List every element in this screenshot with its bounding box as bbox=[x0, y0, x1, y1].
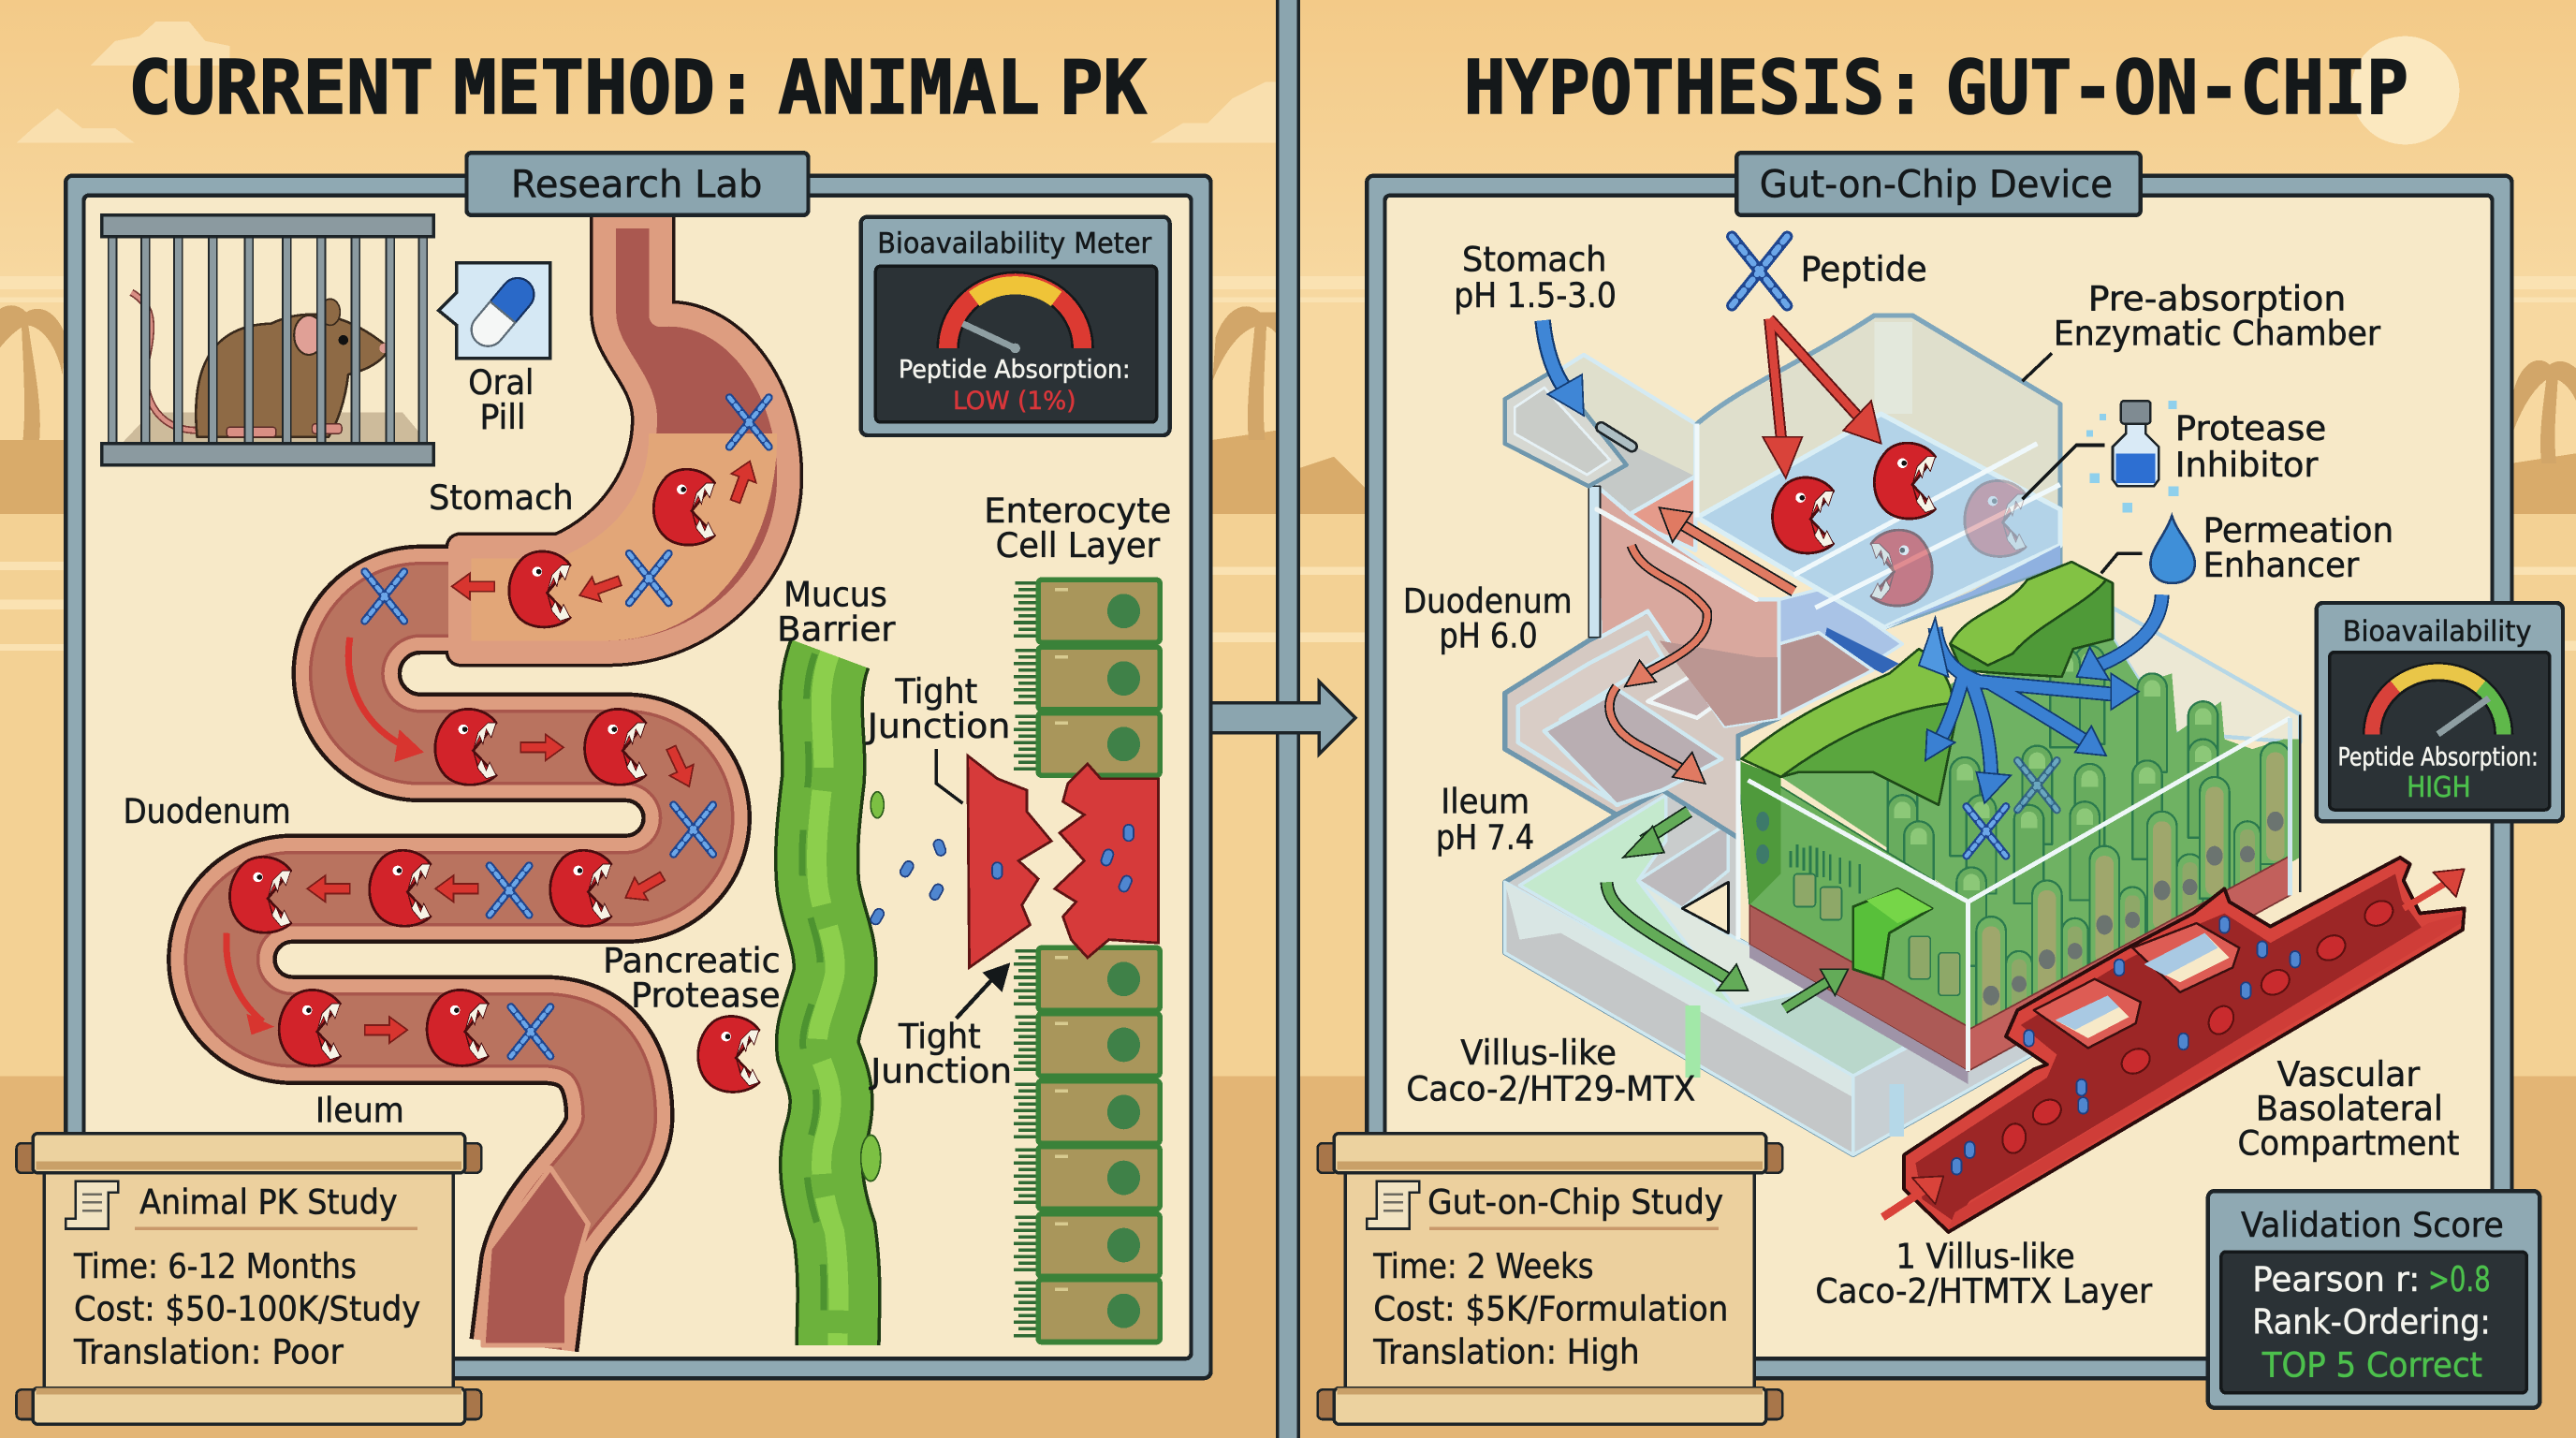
bioavailability meter bbox=[861, 217, 1170, 435]
absorption readout: LOW (1%) bbox=[953, 388, 1076, 416]
validation metrics: >0.8 bbox=[2428, 1259, 2491, 1299]
scroll: animal PK study bbox=[17, 1134, 481, 1424]
interior villi bbox=[1888, 646, 2217, 966]
label: duodenum pH bbox=[1403, 580, 1573, 655]
inlet arrow bbox=[1543, 320, 1584, 416]
gauge title: Bioavailability bbox=[2343, 615, 2532, 648]
window one bbox=[2034, 979, 2141, 1048]
label: protease inhibitor bbox=[2175, 408, 2326, 485]
label: protease inhibitor: Protease bbox=[2175, 408, 2326, 448]
heading: current method: CURRENT METHOD: ANIMAL PK bbox=[128, 45, 1148, 131]
peptides crossing the layer bbox=[1967, 760, 2056, 856]
label: stomach: Stomach bbox=[429, 477, 574, 518]
label: mucus barrier bbox=[777, 574, 896, 649]
center divider bbox=[1278, 0, 1298, 1438]
meter title: Bioavailability Meter bbox=[877, 227, 1152, 260]
label: permeation enhancer bbox=[2203, 510, 2393, 585]
label: permeation enhancer: Permeation bbox=[2203, 510, 2393, 550]
gut-on-chip device body bbox=[1505, 315, 2300, 1155]
gauge bbox=[948, 283, 1083, 353]
label: mucus barrier: Barrier bbox=[777, 609, 896, 649]
icon: permeation enhancer drop bbox=[2101, 516, 2195, 583]
label: villus-like cells: Caco-2/HT29-MTX bbox=[1406, 1069, 1695, 1109]
scroll stats: Cost: $5K/Formulation bbox=[1373, 1289, 1728, 1329]
label: villus-like cells: Villus-like bbox=[1460, 1033, 1617, 1073]
label: enzymatic chamber bbox=[2023, 279, 2381, 381]
rat bbox=[131, 292, 389, 437]
scroll heading: Gut-on-Chip Study bbox=[1427, 1182, 1723, 1223]
label: pancreatic protease: Pancreatic bbox=[603, 941, 781, 981]
label: protease inhibitor: Inhibitor bbox=[2175, 445, 2319, 485]
validation metrics: TOP 5 Correct bbox=[2261, 1344, 2482, 1385]
basal red layer bbox=[1749, 856, 2291, 1084]
label: tight junction lower bbox=[869, 962, 1012, 1091]
label: stomach pH: Stomach bbox=[1462, 240, 1606, 280]
window two bbox=[2132, 923, 2239, 992]
enzymes in chamber bbox=[1773, 443, 2026, 606]
cube left face bbox=[1738, 760, 1969, 1027]
glass cube edges bbox=[1738, 714, 2300, 1071]
gauge dial bbox=[2372, 671, 2504, 734]
label: duodenum pH: pH 6.0 bbox=[1439, 615, 1538, 655]
lab title plate: Research Lab bbox=[511, 163, 762, 207]
salmon channel arrows bbox=[1609, 507, 1794, 784]
absorbed peptide fragments bbox=[1952, 917, 2300, 1175]
label: oral pill: Oral bbox=[468, 362, 534, 403]
label: tight junction upper bbox=[866, 671, 1010, 803]
label: ileum pH: pH 7.4 bbox=[1436, 817, 1534, 858]
flow arrows bbox=[1543, 318, 2162, 1008]
label: stomach pH: pH 1.5-3.0 bbox=[1454, 275, 1617, 315]
validation score panel bbox=[2208, 1191, 2539, 1408]
label: enterocyte cell layer bbox=[984, 491, 1171, 565]
device title plate bbox=[1736, 153, 2141, 215]
label: villus layer: Caco-2/HTMTX Layer bbox=[1815, 1270, 2153, 1311]
gauge readout bbox=[2338, 744, 2539, 804]
label: enterocyte cell layer: Enterocyte bbox=[984, 491, 1171, 531]
enterocyte cell layer bbox=[1014, 580, 1160, 1343]
validation metrics bbox=[2252, 1259, 2491, 1385]
lab title plate bbox=[466, 153, 809, 215]
scroll stats: Translation: High bbox=[1372, 1331, 1640, 1372]
label: vascular basolateral compartment: Vascular bbox=[2277, 1054, 2421, 1094]
label: pancreatic protease bbox=[603, 941, 781, 1016]
scroll: gut-on-chip study bbox=[1318, 1134, 1782, 1424]
icon and label: peptide: Peptide bbox=[1801, 249, 1927, 289]
label: vascular basolateral compartment bbox=[2237, 1054, 2459, 1164]
mucus barrier bbox=[802, 653, 884, 1345]
label: duodenum: Duodenum bbox=[124, 791, 291, 831]
label: tight junction lower: Junction bbox=[869, 1050, 1012, 1091]
icon: oral pill bubble bbox=[439, 263, 550, 359]
icon: pancreatic protease enzyme bbox=[698, 1017, 759, 1092]
vascular flow arrows bbox=[1882, 869, 2465, 1217]
cube back wall and base bbox=[1781, 608, 2300, 1034]
cube right face villi bbox=[1976, 742, 2291, 1038]
peptide input arrows bbox=[1763, 318, 1881, 478]
lower ileum slab bbox=[1505, 790, 2037, 1155]
arrow: current method to hypothesis bbox=[1209, 682, 1355, 754]
label: tight junction upper: Junction bbox=[866, 706, 1010, 746]
label: duodenum pH: Duodenum bbox=[1403, 580, 1573, 621]
scroll heading: Animal PK Study bbox=[139, 1182, 398, 1223]
label: tight junction upper: Tight bbox=[895, 671, 977, 712]
red blood cells bbox=[2000, 896, 2397, 1155]
label: enzymatic chamber: Enzymatic Chamber bbox=[2054, 313, 2381, 353]
label: oral pill: Pill bbox=[479, 397, 526, 437]
label: vascular basolateral compartment: Compartment bbox=[2237, 1123, 2459, 1164]
heading: hypothesis: HYPOTHESIS: GUT-ON-CHIP bbox=[1464, 45, 2408, 131]
label: ileum pH: Ileum bbox=[1441, 782, 1530, 822]
scroll stats bbox=[1372, 1246, 1728, 1372]
stomach inlet and back column bbox=[1505, 355, 1779, 726]
validation metrics: Pearson r: bbox=[2252, 1259, 2420, 1299]
enzymatic chamber bbox=[1697, 315, 2060, 627]
label: vascular basolateral compartment: Basolateral bbox=[2256, 1089, 2443, 1129]
label: enterocyte cell layer: Cell Layer bbox=[996, 525, 1161, 565]
label: enzymatic chamber: Pre-absorption bbox=[2088, 279, 2346, 319]
label: ileum: Ileum bbox=[315, 1090, 404, 1130]
scroll stats: Translation: Poor bbox=[73, 1331, 344, 1372]
label: ileum pH bbox=[1436, 782, 1534, 858]
green channel arrows bbox=[1606, 812, 1848, 1008]
scroll stats: Time: 2 Weeks bbox=[1372, 1246, 1593, 1286]
label: oral pill bbox=[468, 362, 534, 437]
panel: research lab bbox=[66, 153, 1211, 1378]
absorption readout: Peptide Absorption: bbox=[899, 357, 1131, 385]
mucus layer on cube bbox=[1741, 562, 2113, 805]
gauge readout: Peptide Absorption: bbox=[2338, 744, 2539, 772]
enzymes and peptides in the gut bbox=[227, 398, 768, 1065]
scroll stats: Time: 6-12 Months bbox=[73, 1246, 357, 1286]
label: villus layer bbox=[1815, 1237, 2153, 1311]
label: villus layer: 1 Villus-like bbox=[1895, 1237, 2075, 1277]
bioavailability gauge panel bbox=[2317, 603, 2563, 821]
validation title: Validation Score bbox=[2241, 1205, 2504, 1245]
icon: document bbox=[1367, 1181, 1419, 1228]
scroll stats: Cost: $50-100K/Study bbox=[74, 1289, 420, 1329]
label: pancreatic protease: Protease bbox=[631, 976, 781, 1016]
label: tight junction lower: Tight bbox=[898, 1016, 981, 1056]
blue permeation arrows bbox=[1919, 594, 2162, 803]
label: mucus barrier: Mucus bbox=[783, 574, 887, 614]
label: permeation enhancer: Enhancer bbox=[2203, 545, 2360, 585]
label: villus-like cells bbox=[1406, 1033, 1695, 1109]
icon: protease inhibitor vial bbox=[2023, 401, 2178, 512]
absorption readout bbox=[899, 357, 1131, 416]
duodenum to ileum channel bbox=[1505, 611, 1779, 838]
digestive tract: stomach and intestine bbox=[222, 217, 788, 1345]
vascular basolateral channel bbox=[1882, 858, 2465, 1232]
broken tight junction bbox=[869, 756, 1158, 967]
icon: document bbox=[66, 1181, 118, 1228]
gauge readout: HIGH bbox=[2407, 771, 2471, 804]
device title plate: Gut-on-Chip Device bbox=[1760, 163, 2113, 207]
scroll stats bbox=[73, 1246, 420, 1372]
validation metrics: Rank-Ordering: bbox=[2252, 1302, 2491, 1343]
label: stomach pH bbox=[1454, 240, 1617, 315]
mid chamber under the enzymatic chamber bbox=[1779, 588, 1902, 718]
cage bars bbox=[109, 230, 427, 447]
cage with rat bbox=[102, 215, 433, 465]
cell clip bbox=[1853, 888, 1932, 979]
icon and label: peptide bbox=[1732, 237, 1927, 305]
panel: gut-on-chip device bbox=[1367, 153, 2512, 1378]
